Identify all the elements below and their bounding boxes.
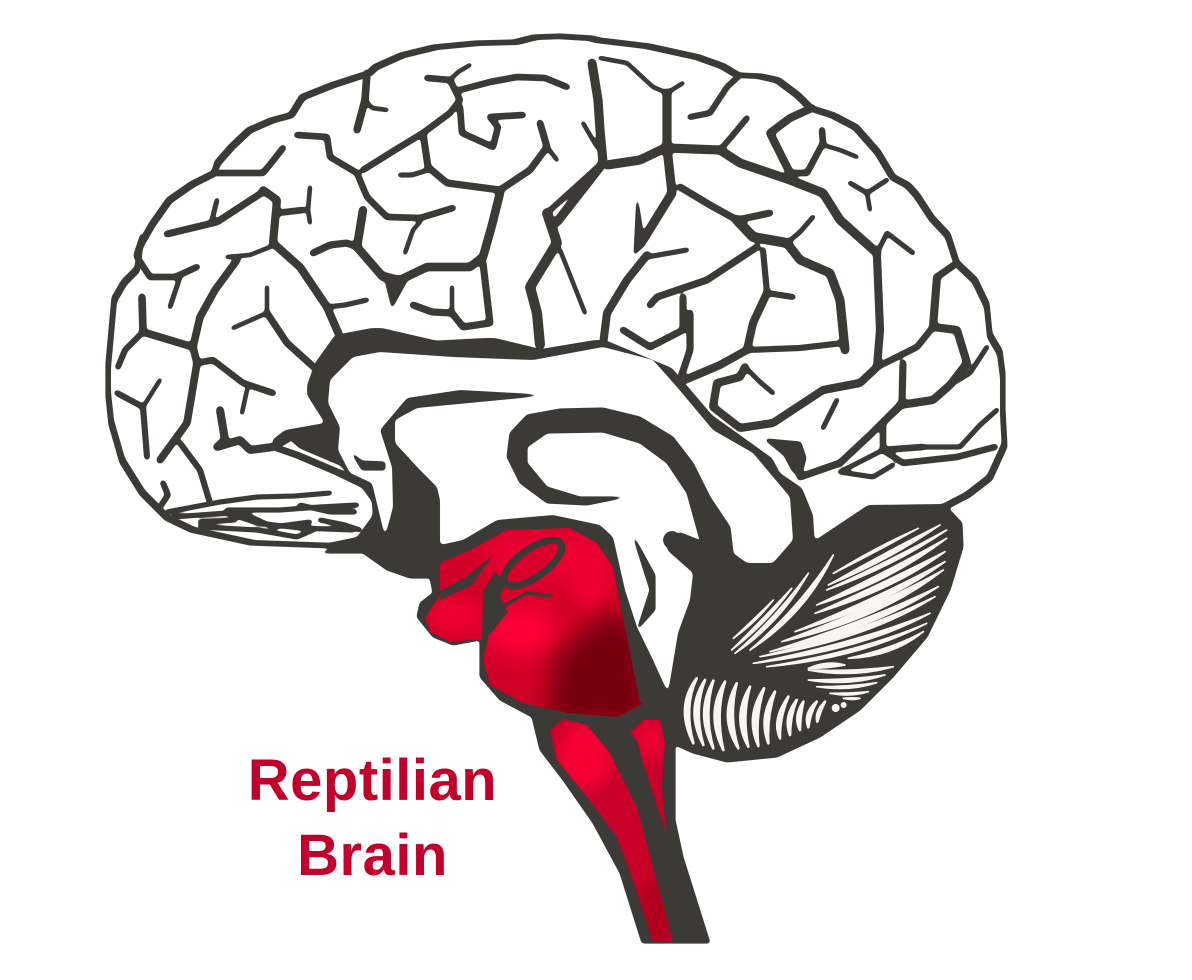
cerebral cortex (106, 34, 1007, 552)
label: Reptilian Brain: Reptilian (248, 748, 497, 813)
dark C-shaped ventricle band (351, 408, 745, 630)
brain illustration (106, 34, 1007, 960)
lower fan lamellae (808, 663, 893, 699)
left slivers (732, 555, 833, 653)
midbrain and pons (425, 528, 643, 717)
brainstem red tracts (550, 719, 673, 942)
corpus callosum and thalamus white region (328, 347, 793, 693)
reptilian brain highlighted in red (425, 528, 673, 942)
dark silhouette of core, brainstem and cerebellum (106, 34, 1007, 943)
cerebellum folia (685, 525, 947, 750)
sulci left hemisphere (117, 63, 603, 510)
label: Reptilian Brain: Brain (297, 823, 448, 888)
label: Reptilian Brain (248, 748, 497, 888)
orbital frontal folds (167, 493, 360, 537)
lower folia (685, 678, 845, 750)
sulci right hemisphere (600, 58, 997, 477)
red structure outlines (438, 532, 569, 642)
upper fan lamellae (753, 525, 947, 667)
